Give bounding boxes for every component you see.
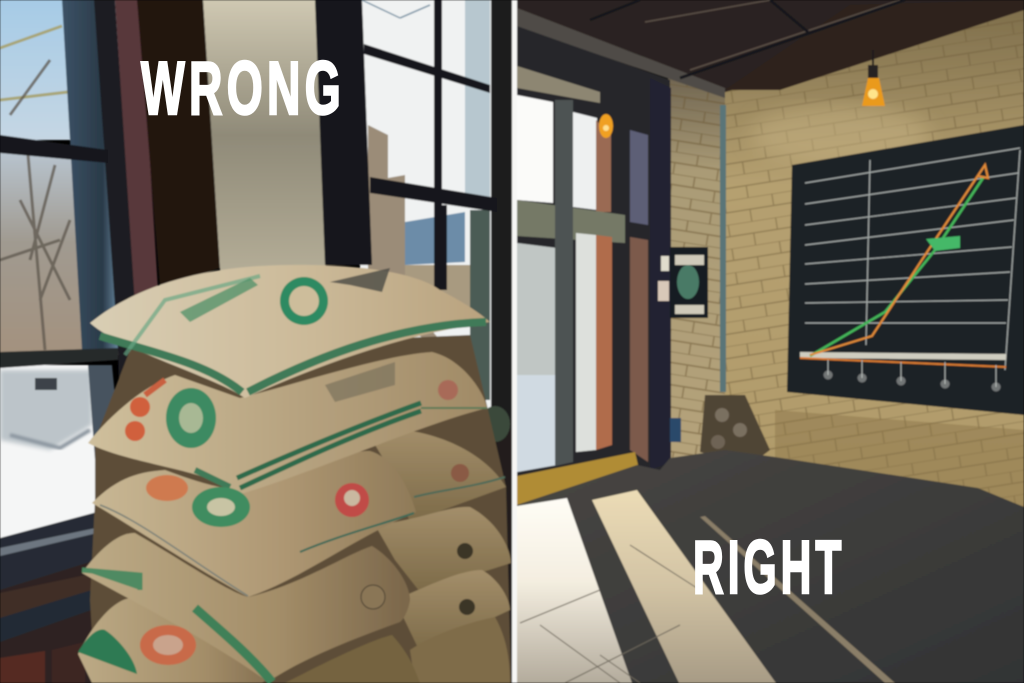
poster [670,247,708,318]
sacks pile on floor [700,395,770,465]
panel: right storage scene [517,0,1024,683]
left window frame [0,0,135,592]
window post [650,78,671,470]
window sill [517,452,638,505]
wall notices [658,256,681,442]
chalkboard with chart [787,125,1024,415]
pipe [720,105,726,392]
divider [512,0,517,683]
bottom sacks [78,598,290,683]
cream wall [203,0,326,270]
heading: RIGHT: RIGHT [693,525,845,609]
sack 4 [82,533,410,682]
panel: wrong storage scene [0,0,512,683]
window panes [517,66,648,472]
sunlight patches on floor [517,490,895,683]
window frame bars [555,100,573,466]
right window frame [315,0,512,683]
shaded mass behind sacks [90,335,511,683]
sack stripes [100,322,486,392]
sack 2 [88,352,487,495]
lamp glow on wall [750,105,930,165]
sack 1 [90,265,490,398]
pendant lamp left [599,114,613,138]
wooden pillar [115,0,220,305]
pendant lamp right [862,50,885,106]
right window glass [360,0,495,420]
sack emblems [280,277,328,325]
sack 3 [92,451,416,597]
floor [517,450,1024,683]
ceiling [517,0,1024,98]
back sacks [365,428,506,522]
left window view [0,0,120,540]
brick wall right section [725,10,1024,510]
sack stack [78,265,511,683]
lower wall dark dirt [775,410,1024,510]
window wall [517,26,670,505]
plant on sill [480,406,510,442]
lower brick wall [0,548,135,683]
brick wall left section [668,75,725,462]
heading: WRONG: WRONG [141,46,345,130]
